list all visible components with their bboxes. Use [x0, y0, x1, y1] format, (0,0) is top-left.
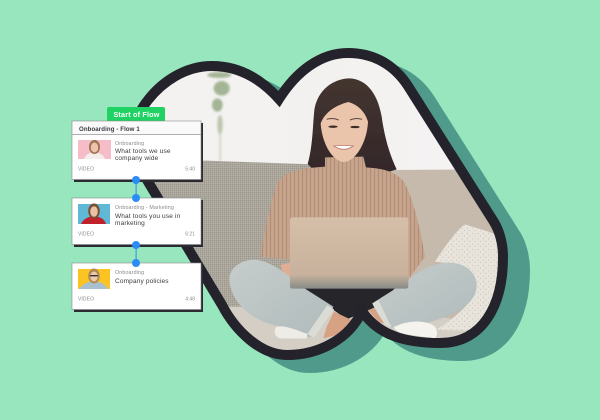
sofa right [363, 169, 510, 340]
card 3: Company policies [115, 278, 169, 285]
card 1: What tools we use [115, 148, 171, 155]
right leg [372, 263, 477, 328]
card 1: VIDEO [78, 166, 94, 172]
connector 2 [132, 241, 140, 267]
hair [308, 78, 397, 180]
card 1: Onboarding - Flow 1 [79, 126, 140, 133]
card 2: Onboarding - Marketing [115, 205, 174, 211]
plant [207, 72, 231, 162]
thumbnail blue [78, 204, 110, 224]
start of flow tag [107, 107, 165, 121]
start of flow tag: Start of Flow [113, 110, 160, 119]
teal shadow shape [156, 66, 525, 368]
card 2: VIDEO [78, 232, 94, 238]
card 1 [72, 121, 203, 182]
thumbnail pink [78, 140, 111, 159]
card 3: 4:48 [185, 296, 195, 302]
left hand [280, 262, 290, 277]
connector 1 [132, 176, 140, 202]
face [321, 102, 368, 162]
dark outline shape [134, 53, 503, 355]
card 1: 5:40 [185, 166, 195, 172]
cuffs [307, 305, 334, 338]
sofa left [150, 161, 330, 340]
seat [223, 307, 510, 360]
photo: woman on sofa with laptop [149, 58, 498, 350]
sweater [261, 157, 425, 282]
ankles [323, 312, 352, 338]
card 2: 6:21 [185, 232, 195, 238]
thumbnail yellow [78, 268, 110, 289]
shorts [305, 288, 395, 318]
card 2 [72, 198, 203, 247]
workflow cards [72, 107, 203, 312]
card 3: Onboarding [115, 270, 144, 276]
left leg [229, 260, 333, 337]
card 1: company wide [115, 155, 159, 162]
card 2: marketing [115, 220, 145, 227]
socks [275, 326, 307, 339]
eyes and mouth [327, 118, 362, 149]
card 3: VIDEO [78, 296, 94, 302]
card 2: What tools you use in [115, 213, 181, 220]
laptop [290, 217, 408, 289]
pillow [435, 224, 507, 330]
card 3 [72, 263, 203, 312]
card 1: Onboarding [115, 141, 144, 147]
